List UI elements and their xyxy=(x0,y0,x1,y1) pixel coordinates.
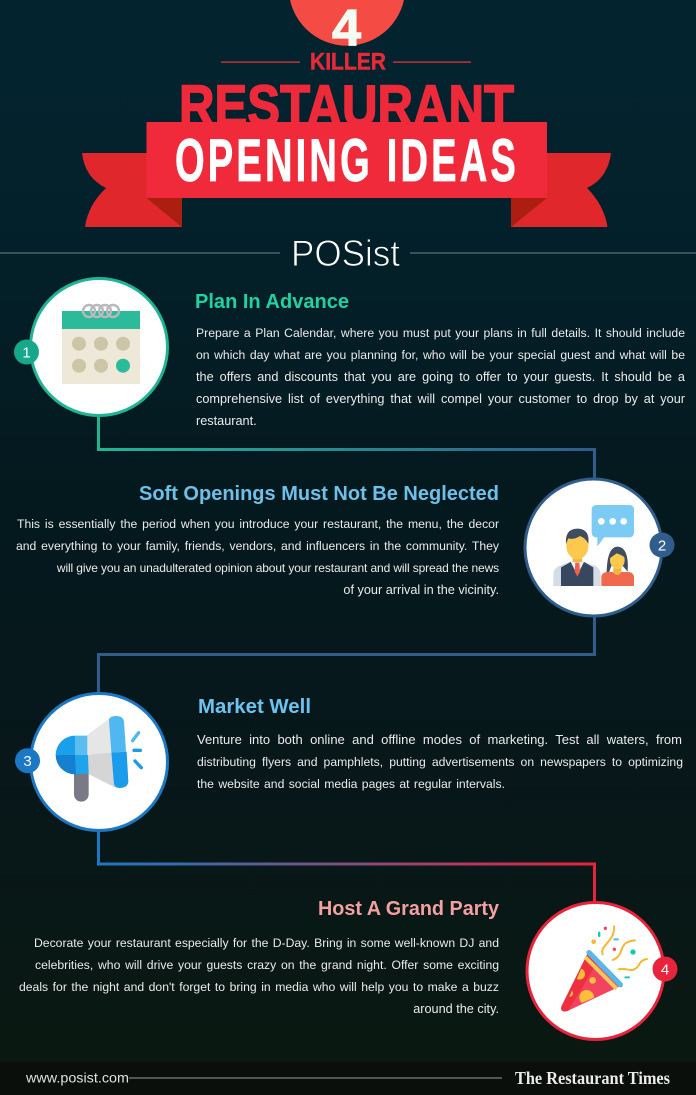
header xyxy=(82,0,611,227)
restaurant heading: RESTAURANT xyxy=(179,74,514,139)
number 4: 4 xyxy=(332,0,362,56)
connector 1 to 2 xyxy=(98,415,594,479)
badge 2: 2 xyxy=(658,538,666,554)
icon: calendar xyxy=(62,305,140,384)
step 2 body text: and everything to your family, friends, vendors, and influencers in the community. They xyxy=(16,539,499,553)
badge 4 xyxy=(652,956,678,982)
the restaurant times logo: The Restaurant Times xyxy=(515,1068,670,1088)
step 2 body text: will give you an unadulterated opinion about your restaurant and will spread the news xyxy=(57,561,499,575)
step 4 body text: deals for the night and don't forget to bring in media who will help you to make a buzz xyxy=(19,980,499,994)
step 2 heading: Soft Openings Must Not Be Neglected xyxy=(139,482,499,505)
ribbon right fold xyxy=(511,198,547,227)
footer xyxy=(0,1062,696,1095)
ribbon right tail xyxy=(511,153,611,227)
step 3 body text: Venture into both online and offline modes of marketing. Test all waters, from xyxy=(197,732,682,747)
connector 2 to 3 xyxy=(98,615,594,693)
icon: megaphone xyxy=(56,716,141,802)
step 4 body text: Decorate your restaurant especially for the D-Day. Bring in some well-known DJ and xyxy=(34,936,499,950)
badge 4: 4 xyxy=(661,962,669,978)
step 2 body text xyxy=(16,517,499,597)
step 1 circle xyxy=(14,278,168,416)
step 2 body text: This is essentially the period when you introduce your restaurant, the menu, the decor xyxy=(17,517,499,531)
badge 3: 3 xyxy=(23,753,32,770)
step 1 body text: the offers and discounts that you are going to offer to your guests. It should be a xyxy=(196,370,685,384)
step 4 body text xyxy=(19,936,499,1016)
step 3 body text xyxy=(197,732,683,791)
step 2 circle xyxy=(525,479,674,616)
step 3 body text: distributing flyers and pamphlets, putting advertisements on newspapers to optimizing xyxy=(197,755,683,769)
step 3 circle xyxy=(15,694,168,830)
step 1 heading: Plan In Advance xyxy=(195,290,349,313)
badge 3 xyxy=(15,748,40,773)
killer label: KILLER xyxy=(310,48,386,76)
step 1 body text: restaurant. xyxy=(196,414,257,428)
badge 1 xyxy=(14,340,39,364)
step 4 body text: celebrities, who will drive your guests crazy on the grand night. Offer some exciting xyxy=(35,958,499,972)
step 1 body text: Prepare a Plan Calendar, where you must put your plans in full details. It should include xyxy=(196,326,685,340)
badge 1: 1 xyxy=(22,344,31,362)
top circle xyxy=(289,0,405,46)
website: www.posist.com xyxy=(25,1070,129,1086)
ribbon left fold xyxy=(146,198,182,227)
icon: people talking xyxy=(553,505,634,586)
banner xyxy=(146,122,547,198)
step 1 body text xyxy=(196,326,685,428)
step 1 body text: comprehensive list of everything that will compel your customer to drop by at your xyxy=(196,392,685,406)
step 1 body text: on which day what are you planning for, who will be your special guest and what will be xyxy=(196,348,685,362)
connector 3 to 4 xyxy=(98,830,594,903)
step 4 heading: Host A Grand Party xyxy=(318,897,500,920)
step 2 body text: of your arrival in the vicinity. xyxy=(343,583,499,597)
step 4 body text: around the city. xyxy=(413,1002,499,1016)
step 4 circle xyxy=(527,902,678,1040)
posist logo: POSist xyxy=(291,233,401,274)
icon: party popper xyxy=(561,926,647,1012)
killer left rule xyxy=(221,62,300,63)
killer right rule xyxy=(393,62,471,63)
ribbon left tail xyxy=(82,153,182,227)
step 3 body text: the website and social media pages at regular intervals. xyxy=(197,777,505,791)
step 3 heading: Market Well xyxy=(198,695,311,718)
badge 2 xyxy=(650,532,674,558)
